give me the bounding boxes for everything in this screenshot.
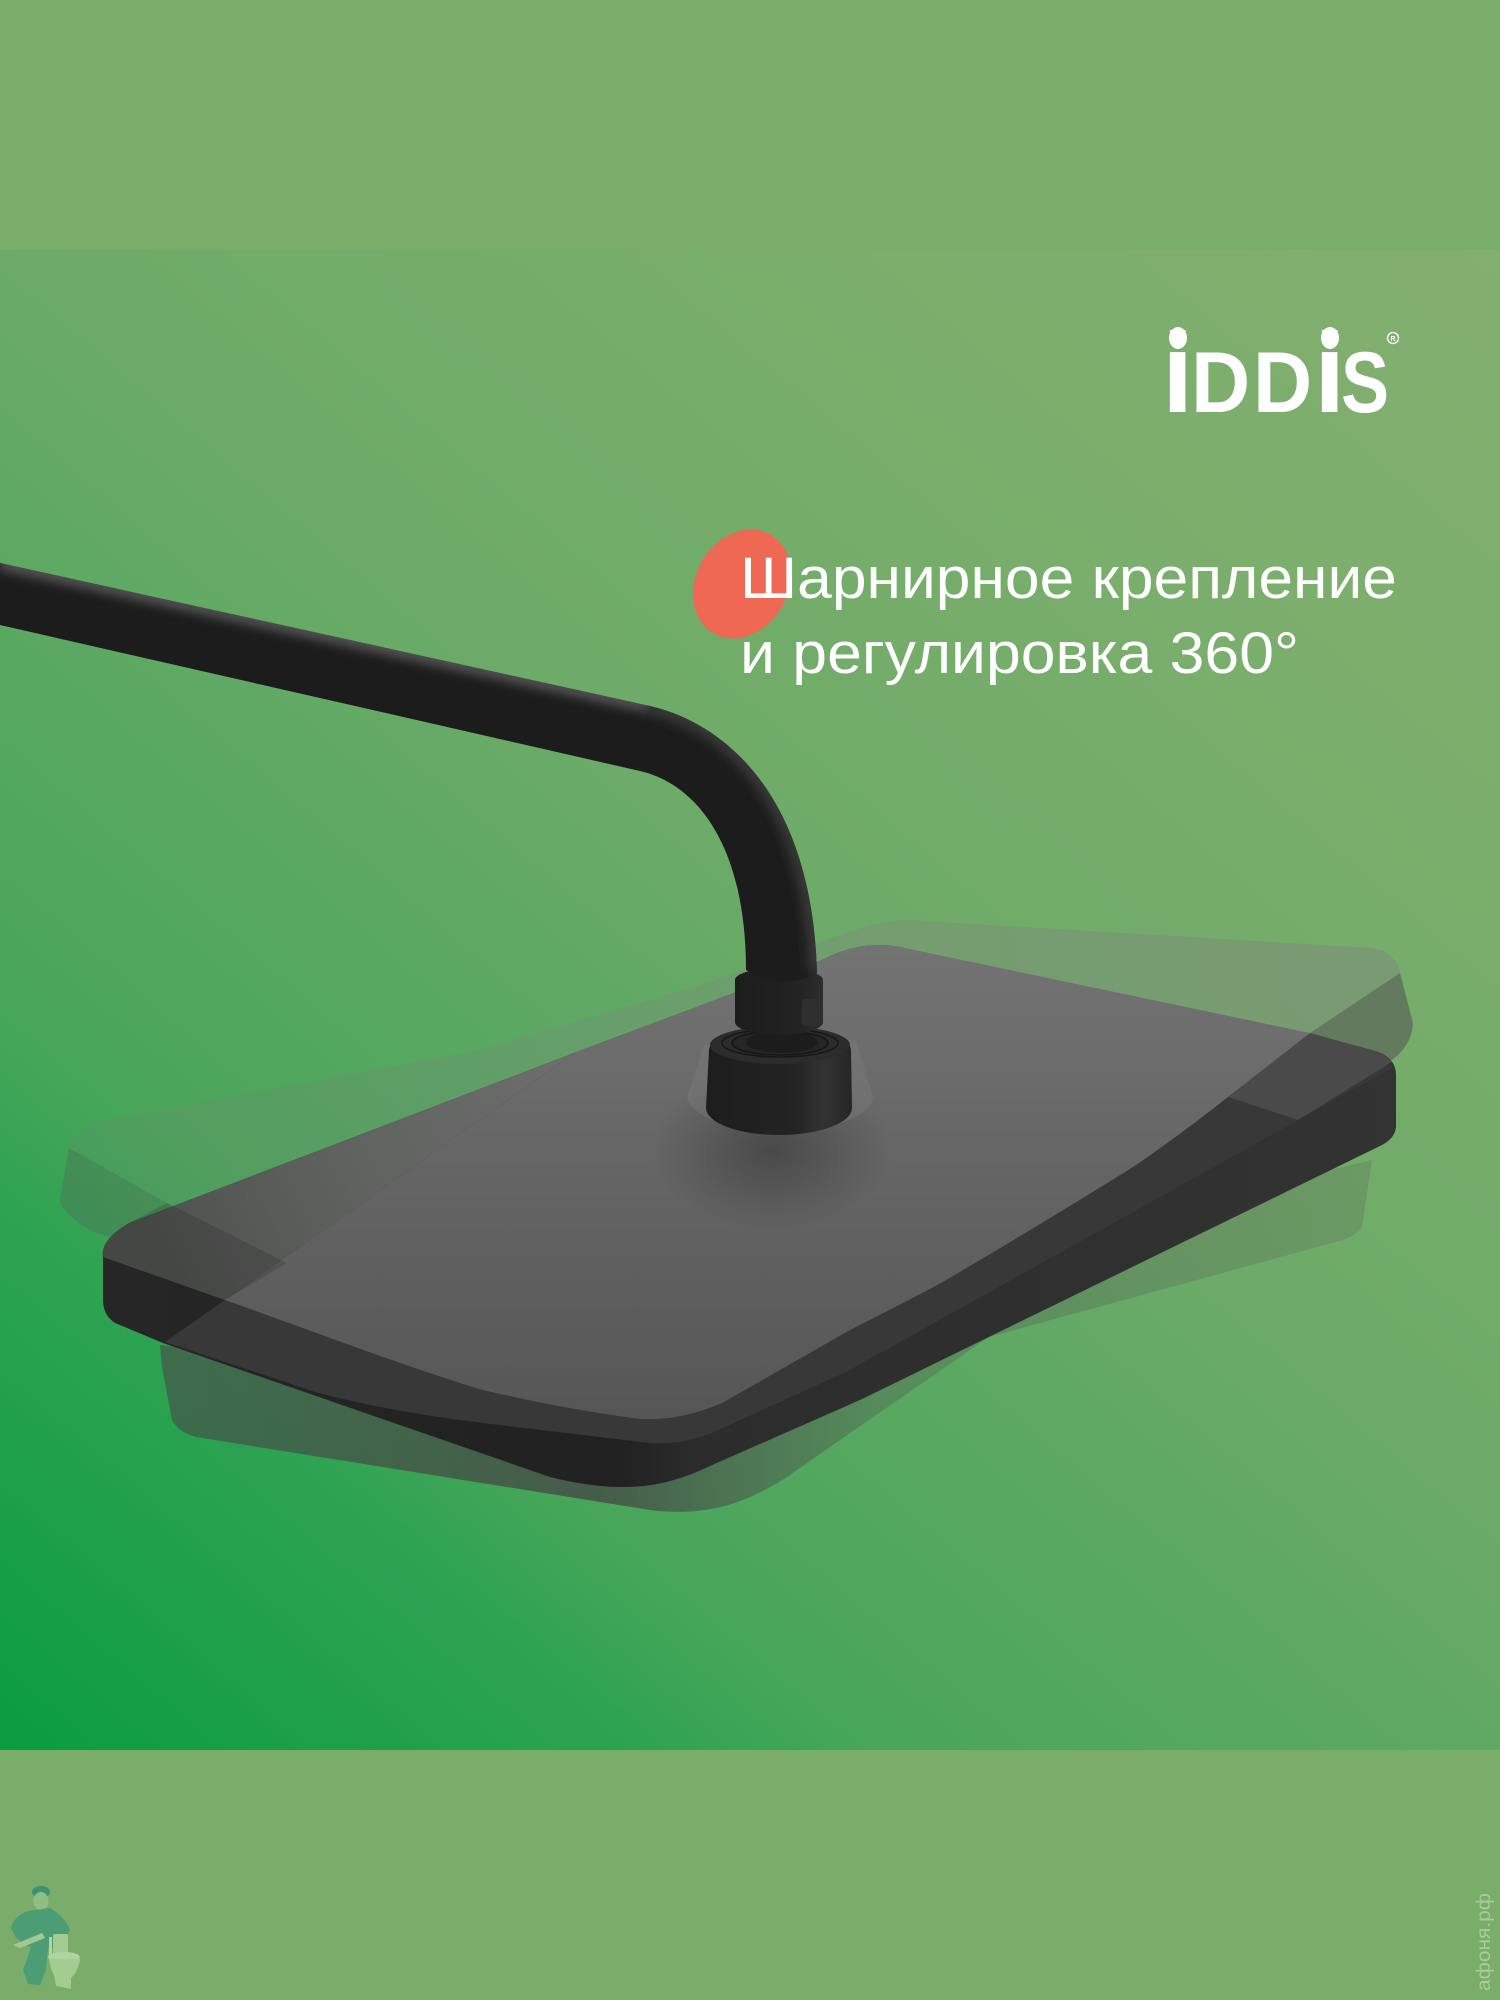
logo: iDDiS: R xyxy=(1390,336,1396,343)
logo: iDDiS: D xyxy=(1253,334,1312,430)
gradient background panel xyxy=(0,250,1500,1750)
heading xyxy=(740,546,1397,686)
plate upper-left wedge xyxy=(103,1053,574,1300)
watermark text: афоня.рф xyxy=(1474,1893,1495,1991)
swivel nut xyxy=(687,968,873,1135)
heading: и регулировка 360° xyxy=(740,621,1299,686)
collar xyxy=(735,968,823,1035)
plate top face xyxy=(225,945,1310,1419)
logo: iDDiS: D xyxy=(1191,334,1250,430)
top band xyxy=(0,0,1500,250)
arm pipe xyxy=(0,563,817,982)
red accent blob xyxy=(674,512,810,656)
ghost edge band on right corner xyxy=(1228,1033,1392,1120)
ghost plate: lower tilt position xyxy=(160,1160,1372,1512)
ghost edge band on left corner xyxy=(103,1203,287,1300)
watermark: plumber with toilet xyxy=(11,1886,80,1989)
bottom band xyxy=(0,1750,1500,2000)
heading: Шарнирное крепление xyxy=(740,546,1397,611)
shower head plate xyxy=(103,945,1396,1487)
logo: iDDiS: S xyxy=(1341,334,1389,430)
nut ghost halo xyxy=(687,1040,873,1135)
nut top rings xyxy=(710,1026,850,1064)
plate body xyxy=(103,945,1396,1487)
toilet xyxy=(48,1934,80,1989)
logo: iDDiS: i xyxy=(1162,310,1193,436)
ghost plate: upper tilt position xyxy=(60,920,1413,1300)
logo: iDDiS xyxy=(1162,310,1398,436)
plumber figure xyxy=(11,1886,70,1985)
shadow under nut xyxy=(652,1070,892,1230)
logo: iDDiS: i xyxy=(1314,310,1345,436)
translucent tilted side band xyxy=(165,1060,1396,1443)
nut body xyxy=(706,1026,852,1135)
collar slot xyxy=(802,999,822,1026)
